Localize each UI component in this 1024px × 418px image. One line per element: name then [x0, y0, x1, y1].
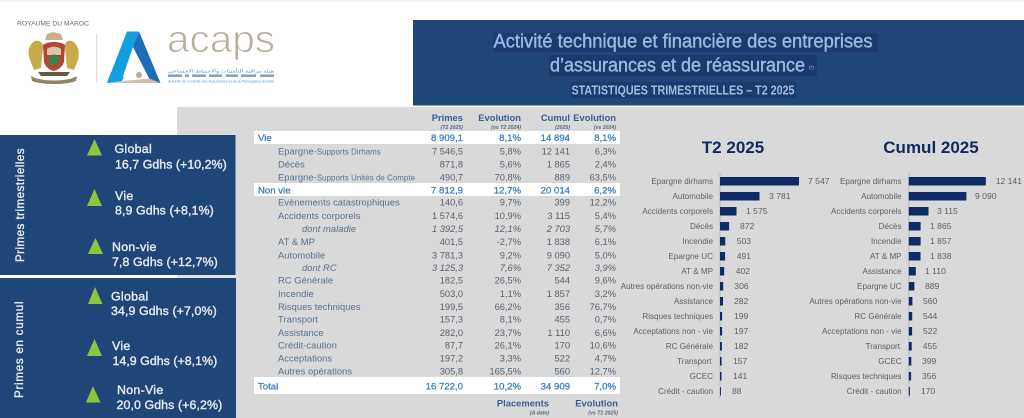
row: accidents: Accidents corporels — [278, 211, 361, 221]
chart: Cumul 2025 — [809, 138, 1022, 398]
row: incendie: 1,1% — [500, 289, 521, 299]
row: autres operations: 165,5% — [489, 366, 521, 376]
row: total: 10,2% — [494, 382, 521, 392]
chart rows: 455 — [923, 341, 937, 351]
row: accidents: 5,4% — [595, 211, 616, 221]
chart rows: 560 — [923, 296, 938, 306]
chart rows: 182 — [734, 341, 749, 351]
row: acceptations: 197,2 — [440, 354, 463, 364]
row: deces: 871,8 — [440, 160, 463, 170]
row: transport: 8,1% — [500, 314, 521, 324]
row: dont rc — [302, 263, 616, 273]
row: risques techniques: 356 — [554, 302, 570, 312]
row: dont rc: 7 352 — [547, 263, 571, 273]
row: acceptations: 4,7% — [595, 354, 616, 364]
chart rows: 503 — [737, 236, 751, 246]
table header: (vs 2024) — [594, 125, 616, 131]
row: automobile: Automobile — [278, 250, 325, 260]
row: credit caution: 10,6% — [590, 340, 616, 350]
kpi: vie cumul: Vie — [112, 339, 131, 353]
row: at mp: -2,7% — [497, 237, 521, 247]
chart rows: 1 857 — [930, 236, 952, 246]
icon: coat of arms — [29, 32, 79, 84]
row: risques techniques: 199,5 — [440, 302, 463, 312]
row: credit caution: 170 — [554, 340, 570, 350]
row: accidents: 10,9% — [495, 211, 521, 221]
row: transport: 455 — [554, 314, 570, 324]
kpi: non-vie cumul: Non-Vie — [117, 383, 164, 397]
row: epargne dirhams: 5,8% — [500, 146, 521, 156]
chart rows: Crédit - caution — [847, 387, 902, 396]
row: credit caution: 26,1% — [495, 340, 521, 350]
row: incendie: Incendie — [278, 289, 314, 299]
chart rows: Acceptations non - vie — [822, 327, 902, 336]
kpi: vie cumul: 14,9 Gdhs (+8,1%) — [112, 354, 218, 368]
chart rows: 522 — [923, 326, 938, 336]
row: at mp: 1 838 — [547, 237, 570, 247]
row: total: 34 909 — [541, 382, 570, 392]
chart title: T2 2025 — [702, 138, 764, 157]
table header: Primes — [432, 112, 463, 123]
row: total: 7,0% — [594, 382, 616, 392]
row: rc generale: 26,5% — [495, 276, 521, 286]
chart rows: Automobile — [672, 192, 713, 201]
chart rows: 3 115 — [937, 206, 958, 216]
chart rows: 872 — [740, 221, 755, 231]
row: epargne uc: 889 — [554, 172, 570, 182]
chart rows: 544 — [923, 311, 938, 321]
row: at mp: 6,1% — [595, 237, 616, 247]
table: premiums — [254, 112, 620, 416]
panel: primes en cumul — [0, 278, 236, 418]
row: at mp — [278, 237, 616, 247]
row: autres operations: Autres opérations — [278, 366, 352, 376]
chart rows: Epargne dirhams — [840, 177, 902, 186]
chart rows: GCEC — [690, 372, 713, 381]
row: accidents — [278, 211, 616, 221]
panel: header banner — [413, 20, 1024, 106]
kpi: non-vie cumul: 20,0 Gdhs (+6,2%) — [116, 398, 222, 412]
row: evenements: 140,6 — [440, 198, 463, 208]
chart rows: 1 838 — [930, 251, 952, 261]
row: assistance: 6,6% — [595, 328, 616, 338]
row: vie: 8,1% — [594, 133, 616, 144]
heading line 2: (*) — [809, 65, 814, 70]
chart rows: 282 — [734, 296, 749, 306]
footer headers: placements: Placements — [497, 398, 549, 408]
row: deces: 5,6% — [500, 160, 521, 170]
table header: (T2 2025) — [440, 125, 463, 131]
label: primes trimestrielles: Primes trimestrielles — [14, 148, 27, 262]
kpi: vie: 8,9 Gdhs (+8,1%) — [115, 204, 214, 218]
row: acceptations: 3,3% — [500, 354, 521, 364]
chart rows: RC Générale — [666, 342, 713, 351]
chart rows: GCEC — [878, 357, 902, 366]
chart rows: Autres opérations non-vie — [809, 297, 902, 306]
logo: Royaume du Maroc and ACAPS — [17, 19, 275, 84]
chart rows: Crédit - caution — [658, 387, 713, 396]
row: assistance — [278, 328, 616, 338]
row: vie: 8,1% — [499, 133, 521, 144]
chart rows: 199 — [734, 311, 749, 321]
row: vie — [254, 131, 620, 144]
chart rows: Accidents corporels — [831, 207, 902, 216]
kpi: global cumul: Global — [111, 290, 148, 304]
panel: primes trimestrielles — [0, 135, 236, 275]
kpi: global cumul: 34,9 Gdhs (+7,0%) — [111, 304, 217, 318]
row: incendie — [278, 289, 616, 299]
chart rows: 491 — [737, 251, 751, 261]
row: rc generale — [278, 276, 616, 286]
kpi: global: Global — [114, 142, 152, 156]
row: rc generale: RC Générale — [278, 276, 333, 286]
row: risques techniques: 76,7% — [590, 302, 616, 312]
row: automobile — [278, 250, 616, 260]
row: assistance: Assistance — [278, 328, 324, 338]
row: automobile: 5,0% — [595, 250, 616, 260]
row: evenements: 399 — [554, 198, 570, 208]
chart rows — [809, 176, 1022, 396]
row: evenements — [278, 198, 616, 208]
chart rows: 141 — [733, 371, 748, 381]
row: rc generale: 544 — [554, 276, 570, 286]
chart rows: 1 865 — [930, 221, 952, 231]
row: accidents: 3 115 — [547, 211, 570, 221]
chart rows: AT & MP — [681, 267, 713, 276]
panel: grey content background — [177, 107, 1024, 418]
row: evenements: 9,7% — [500, 198, 521, 208]
row: acceptations: Acceptations — [278, 354, 332, 364]
row: epargne dirhams: 6,3% — [595, 146, 616, 156]
text: agency name: Autorité de Contrôle des Assurances et de la Prévoyance Sociale — [168, 80, 274, 84]
row: risques techniques — [278, 302, 616, 312]
row: deces: 2,4% — [595, 160, 616, 170]
chart rows: Transport — [677, 357, 712, 366]
row: dont maladie — [302, 224, 616, 234]
chart rows: Incendie — [871, 237, 902, 246]
row: non vie — [254, 183, 620, 196]
table header: Evolution — [478, 112, 521, 123]
footer headers: placements: (A date) — [530, 410, 549, 416]
row: non vie: 20 014 — [541, 186, 571, 196]
row: vie: Vie — [258, 133, 272, 144]
row: credit caution: 87,7 — [445, 340, 463, 350]
row: epargne uc: Epargne-Supports Unités de Compte — [278, 172, 416, 182]
text: agency name: هيئة مراقبة التأمينات والاحتياط الاجتماعي — [168, 68, 274, 74]
chart rows: 157 — [733, 356, 748, 366]
row: dont maladie: 2 703 — [546, 224, 571, 234]
row: autres operations — [278, 366, 616, 376]
row: incendie: 1 857 — [547, 289, 570, 299]
chart rows: 3 781 — [769, 191, 791, 201]
row: transport: 157,3 — [440, 314, 463, 324]
kpi: vie — [87, 189, 214, 218]
chart rows: Décès — [879, 222, 902, 231]
table header: Cumul — [541, 112, 570, 123]
divider between logos — [96, 34, 97, 83]
text: Royaume du Maroc: ROYAUME DU MAROC — [17, 20, 89, 28]
row: evenements: Evènements catastrophiques — [278, 198, 400, 208]
chart rows: RC Générale — [854, 312, 902, 321]
table header: (vs T2 2024) — [491, 125, 521, 131]
row: epargne dirhams — [278, 146, 616, 156]
chart rows: Acceptations non - vie — [633, 327, 713, 336]
row: automobile: 9,2% — [500, 250, 521, 260]
chart rows: Assistance — [862, 267, 902, 276]
row: epargne dirhams: 12 141 — [542, 146, 570, 156]
row: dont maladie: 1 392,5 — [432, 224, 464, 234]
row: epargne uc — [278, 172, 616, 182]
text: acaps wordmark: acaps — [167, 19, 275, 61]
row: transport: 0,7% — [595, 314, 616, 324]
chart rows: Transport — [866, 342, 901, 351]
chart rows: Autres opérations non-vie — [621, 282, 713, 291]
chart rows: Epargne UC — [857, 282, 902, 291]
row: epargne uc: 490,7 — [440, 172, 463, 182]
row: at mp: AT & MP — [278, 237, 315, 247]
row: automobile: 9 090 — [547, 250, 570, 260]
kpi: vie: Vie — [115, 189, 134, 203]
chart rows: Risques techniques — [831, 372, 902, 381]
row: deces — [278, 160, 616, 170]
heading line 2: d’assurances et de réassurance — [550, 56, 805, 76]
kpi: non-vie: Non-vie — [112, 240, 157, 254]
row: credit caution — [278, 340, 616, 350]
row: at mp: 401,5 — [440, 237, 463, 247]
row: incendie: 3,2% — [595, 289, 616, 299]
row: epargne dirhams: Epargne-Supports Dirhams — [278, 146, 381, 156]
chart: T2 2025 — [621, 138, 830, 398]
kpi: global — [87, 139, 227, 172]
chart title: Cumul 2025 — [883, 138, 979, 157]
chart rows: Epargne UC — [668, 252, 713, 261]
chart rows: 402 — [736, 266, 750, 276]
row: non vie: 7 812,9 — [431, 186, 463, 196]
row: non vie: 6,2% — [594, 186, 616, 196]
chart rows: 889 — [925, 281, 940, 291]
row: accidents: 1 574,6 — [432, 211, 463, 221]
row: vie: 8 909,1 — [431, 133, 463, 144]
kpi: global cumul — [88, 287, 217, 318]
chart rows — [621, 176, 830, 396]
chart rows: 7 547 — [808, 176, 830, 186]
row: deces: 1 865 — [547, 160, 570, 170]
table header: Evolution — [573, 112, 616, 123]
divider: white line between sidebar panels — [0, 276, 177, 278]
row: risques techniques: Risques techniques — [278, 302, 361, 312]
chart rows: 88 — [732, 386, 742, 396]
kpi: non-vie cumul — [86, 383, 222, 412]
row: dont maladie: 12,1% — [495, 224, 521, 234]
footer headers: placements — [497, 398, 618, 416]
text: agency name — [168, 68, 274, 84]
icon: ACAPS A mark — [107, 32, 160, 83]
row: epargne uc: 63,5% — [590, 172, 616, 182]
row: dont maladie: 5,7% — [595, 224, 616, 234]
row: risques techniques: 66,2% — [495, 302, 521, 312]
row: evenements: 12,2% — [590, 198, 616, 208]
footer headers: placements: (vs T1 2025) — [588, 410, 618, 416]
row: epargne dirhams: 7 546,5 — [432, 146, 463, 156]
row: deces: Décès — [278, 160, 305, 170]
chart rows: Epargne dirhams — [651, 177, 713, 186]
table header — [432, 112, 616, 131]
chart rows: 306 — [734, 281, 749, 291]
footer headers: placements: Evolution — [575, 398, 618, 408]
row: epargne uc: 70,8% — [495, 172, 521, 182]
row: total — [254, 377, 620, 394]
heading line 1: Activité technique et financière des entreprises — [494, 32, 872, 52]
row: total: Total — [258, 382, 278, 392]
row: total: 16 722,0 — [426, 382, 463, 392]
row: rc generale: 182,5 — [440, 276, 463, 286]
chart rows: 1 575 — [746, 206, 768, 216]
chart rows: AT & MP — [870, 252, 902, 261]
row: non vie: Non vie — [258, 186, 291, 196]
row: autres operations: 560 — [554, 366, 570, 376]
row: non vie: 12,7% — [494, 186, 521, 196]
chart rows: 12 141 — [996, 176, 1022, 186]
row: assistance: 282,0 — [440, 328, 463, 338]
chart rows: Décès — [690, 222, 713, 231]
chart rows: 9 090 — [975, 191, 997, 201]
chart rows: Assistance — [674, 297, 713, 306]
row: acceptations: 522 — [554, 354, 570, 364]
row: rc generale: 9,6% — [595, 276, 616, 286]
row: dont rc: dont RC — [302, 263, 337, 273]
row: vie: 14 894 — [541, 133, 571, 144]
row: automobile: 3 781,3 — [432, 250, 463, 260]
row: autres operations: 305,8 — [440, 366, 463, 376]
table header: (2025) — [555, 125, 570, 131]
row: incendie: 503,0 — [440, 289, 463, 299]
kpi: global: 16,7 Gdhs (+10,2%) — [115, 158, 227, 172]
chart rows: Accidents corporels — [642, 207, 713, 216]
row: credit caution: Crédit-caution — [278, 340, 337, 350]
row: dont rc: 7,6% — [500, 263, 521, 273]
row: transport: Transport — [278, 314, 318, 324]
label: primes en cumul: Primes en cumul — [13, 301, 26, 398]
chart rows: Automobile — [861, 192, 902, 201]
subheading: STATISTIQUES TRIMESTRIELLES – T2 2025 — [572, 84, 794, 98]
row: autres operations: 12,7% — [590, 366, 616, 376]
row: assistance: 1 110 — [547, 328, 570, 338]
chart rows: 356 — [922, 371, 937, 381]
chart rows: 197 — [734, 326, 749, 336]
row: transport — [278, 314, 616, 324]
kpi: non-vie — [88, 238, 218, 269]
row: dont rc: 3 125,3 — [432, 263, 464, 273]
row: dont rc: 3,9% — [595, 263, 616, 273]
kpi: non-vie: 7,8 Gdhs (+12,7%) — [112, 255, 218, 269]
row: acceptations — [278, 354, 616, 364]
chart rows: Risques techniques — [642, 312, 713, 321]
chart rows: Incendie — [682, 237, 713, 246]
chart rows: 1 110 — [925, 266, 946, 276]
row: assistance: 23,7% — [495, 328, 521, 338]
chart rows: 170 — [921, 386, 936, 396]
kpi: vie cumul — [87, 339, 218, 368]
row: dont maladie: dont maladie — [302, 224, 356, 234]
chart rows: 399 — [922, 356, 937, 366]
